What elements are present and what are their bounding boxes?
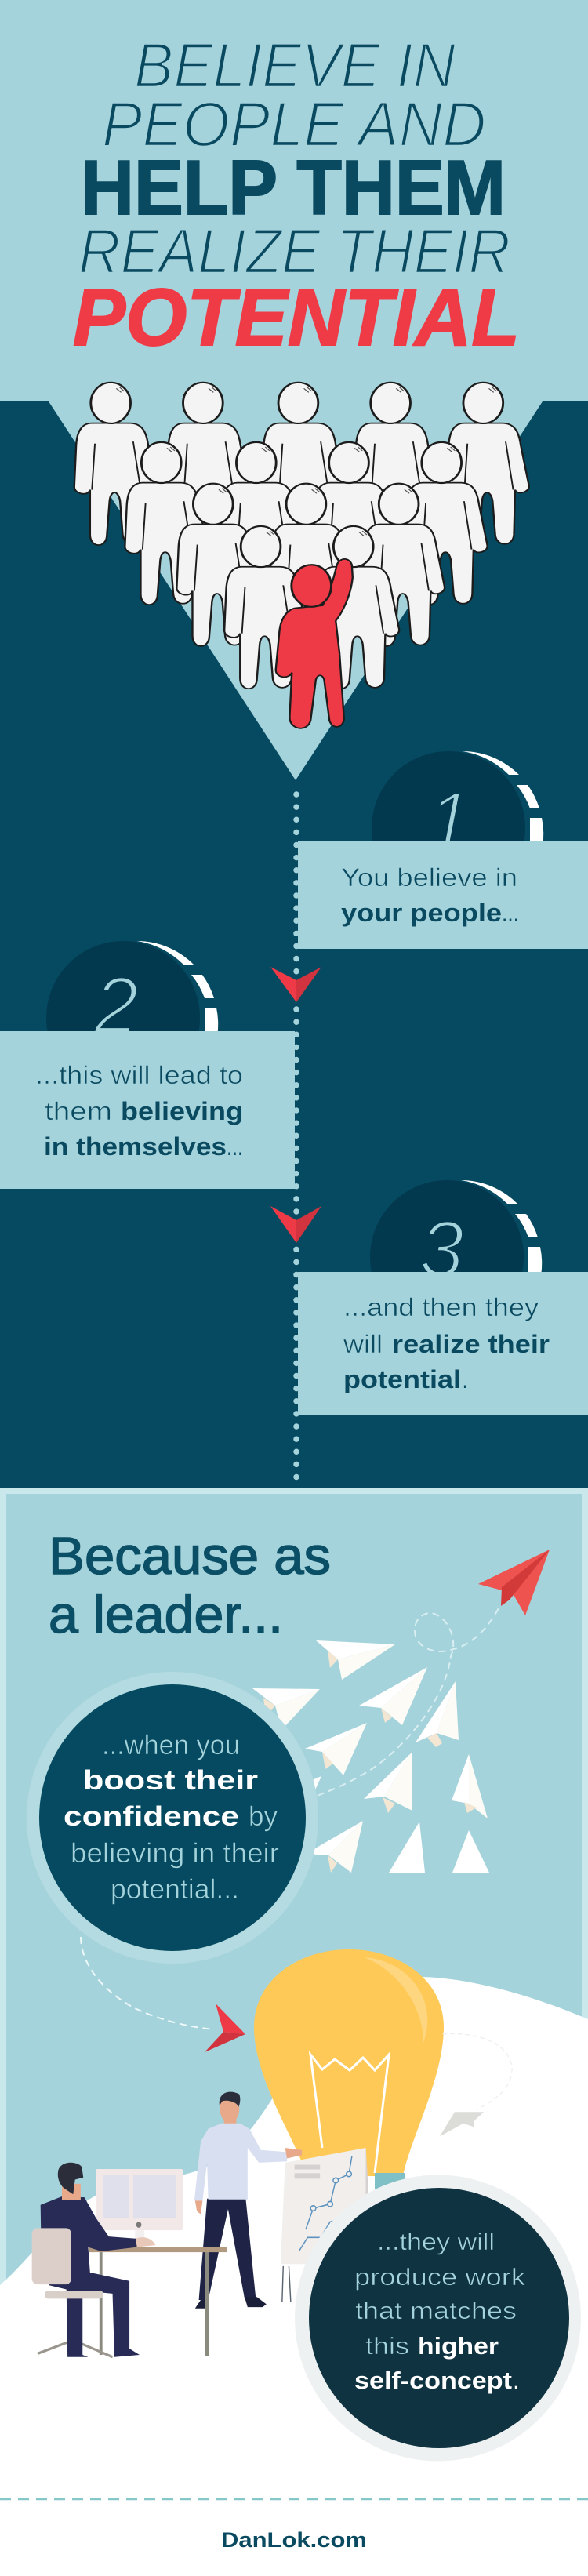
step 3 box: will <box>343 1330 383 1358</box>
step 3 box: ...and then they <box>343 1293 539 1321</box>
section heading: a leader... <box>49 1586 283 1644</box>
callout: higher self-concept <box>295 2175 581 2461</box>
seated man and chair <box>32 2163 156 2357</box>
callout: boost their confidence: believing in their <box>71 1838 279 1869</box>
step 3 box: . <box>462 1365 469 1393</box>
callout: boost their confidence: confidence <box>64 1801 239 1832</box>
callout: higher self-concept: . <box>513 2367 520 2394</box>
callout: higher self-concept: this <box>365 2332 409 2360</box>
step 2 box: them <box>45 1097 112 1125</box>
step 2 number badge: 2 <box>93 961 139 1050</box>
step 1 box: ... <box>502 899 519 927</box>
dark steps background with spotlight triangle <box>0 401 588 1488</box>
step 3 number badge <box>370 1180 542 1334</box>
grey paper plane with trail <box>440 2033 512 2136</box>
section heading: Because as <box>49 1527 331 1586</box>
callout: higher self-concept: self-concept <box>354 2367 512 2394</box>
step 2 box: ...this will lead to <box>35 1061 243 1089</box>
dotted connector line <box>293 794 299 1482</box>
red paper plane <box>478 1550 550 1615</box>
step 1 number badge: 1 <box>427 776 471 864</box>
callout: higher self-concept: produce work <box>354 2263 526 2291</box>
white hill background <box>0 1977 588 2576</box>
step 3 box <box>298 1272 588 1415</box>
step 1 box <box>298 841 588 949</box>
step 1 box: You believe in <box>341 863 517 892</box>
step 3 number badge: 3 <box>419 1204 464 1294</box>
dashed curve to red arrow <box>81 1937 214 2029</box>
lower panel frame <box>0 1488 588 2295</box>
callout: boost their confidence: potential... <box>111 1874 239 1905</box>
callout: higher self-concept: that matches <box>355 2297 517 2324</box>
standing man <box>194 2092 302 2309</box>
step 3 box: potential <box>343 1365 461 1393</box>
step 2 box: in themselves <box>44 1132 227 1161</box>
title <box>73 31 520 362</box>
flip chart <box>281 2148 369 2302</box>
red arrow right <box>205 2004 245 2052</box>
title: HELP THEM <box>81 144 506 231</box>
step 3 box: realize their <box>392 1330 550 1358</box>
step 2 box <box>0 1031 295 1189</box>
step 2 box: ... <box>227 1132 243 1161</box>
title: BELIEVE IN <box>134 31 456 101</box>
step 2 box: believing <box>121 1097 243 1125</box>
paper planes <box>252 1640 489 1873</box>
callout: boost their confidence <box>27 1672 318 1964</box>
title: POTENTIAL <box>73 272 520 362</box>
section heading <box>49 1527 331 1644</box>
crowd of people with one red figure <box>74 383 529 728</box>
desk and monitor <box>89 2169 227 2356</box>
light bulb <box>254 1949 444 2201</box>
callout: boost their confidence: ...when you <box>102 1730 240 1760</box>
lower panel background <box>6 1494 582 2294</box>
callout: boost their confidence: boost their <box>83 1765 258 1796</box>
callout: higher self-concept: ...they will <box>377 2228 495 2255</box>
red arrow down 2 <box>270 1206 321 1243</box>
callout: higher self-concept: higher <box>418 2332 499 2360</box>
title: PEOPLE AND <box>102 89 486 160</box>
footer website: DanLok.com <box>221 2528 367 2552</box>
dashed flight path <box>315 1608 499 1797</box>
office scene <box>32 2092 369 2357</box>
title: REALIZE THEIR <box>78 216 510 287</box>
step 2 number badge <box>46 941 218 1095</box>
step 1 box: your people <box>341 899 502 927</box>
header background <box>0 0 588 784</box>
red arrow down 1 <box>270 967 321 1002</box>
callout: boost their confidence: by <box>249 1801 278 1832</box>
step 1 number badge <box>372 751 543 905</box>
